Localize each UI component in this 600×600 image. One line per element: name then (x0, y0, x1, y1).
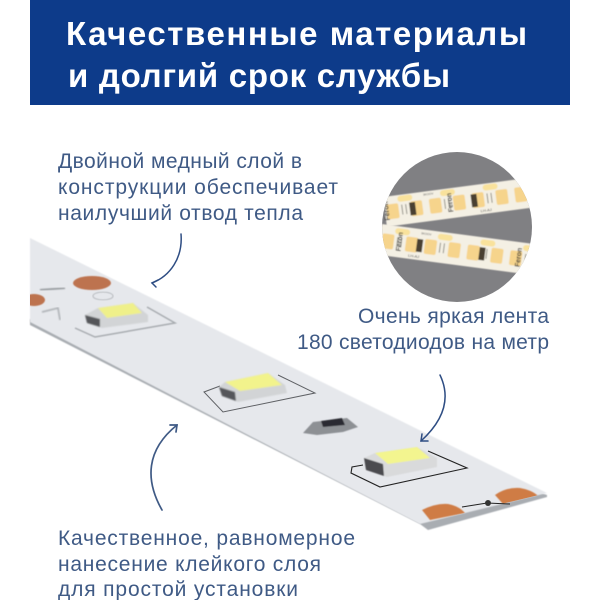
text block: copper layer: Двойной медный слой в (58, 150, 302, 173)
text block: bright strip: 180 светодиодов на метр (297, 331, 549, 354)
lower strip band: Feron (396, 232, 405, 252)
upper strip band: 3KOOV (423, 191, 434, 197)
title (66, 15, 527, 94)
copper pads (23, 276, 538, 520)
upper strip band: LH-AJ (480, 207, 492, 213)
strip edge (30, 319, 547, 530)
upper strip band (384, 179, 530, 226)
text block: bright strip (297, 305, 549, 354)
arrow: to adhesive layer (151, 425, 177, 510)
text block: adhesive layer: Качественное, равномерное (58, 527, 355, 550)
LED 1 (85, 303, 148, 328)
text block: adhesive layer: нанесение клейкого слоя (58, 553, 321, 576)
text block: copper layer (58, 150, 338, 225)
LED 3 (364, 447, 437, 477)
circle photo: close-up of LED strip (382, 152, 532, 302)
lower strip band: Feron (515, 247, 524, 268)
lower strip band (382, 224, 530, 274)
text block: copper layer: конструкции обеспечивает (58, 176, 338, 199)
title: и долгий срок службы (68, 57, 450, 94)
title: Качественные материалы (66, 15, 527, 52)
header banner (30, 0, 570, 105)
strip surface (30, 238, 547, 524)
upper strip band: Feron (446, 192, 456, 213)
text block: copper layer: наилучший отвод тепла (58, 202, 303, 225)
LED strip photo (23, 238, 547, 530)
PCB traces (40, 288, 510, 507)
arrow: to bright LED (421, 375, 445, 441)
arrow: to copper layer (152, 234, 181, 287)
text block: adhesive layer (58, 527, 355, 600)
LED 2 (219, 373, 287, 402)
upper strip band: Feron (383, 201, 392, 221)
text block: bright strip: Очень яркая лента (358, 305, 549, 328)
lower strip band: LH-AJ (408, 253, 420, 259)
resistor chip (303, 418, 358, 435)
lower strip band: 3KOOV (421, 231, 432, 237)
